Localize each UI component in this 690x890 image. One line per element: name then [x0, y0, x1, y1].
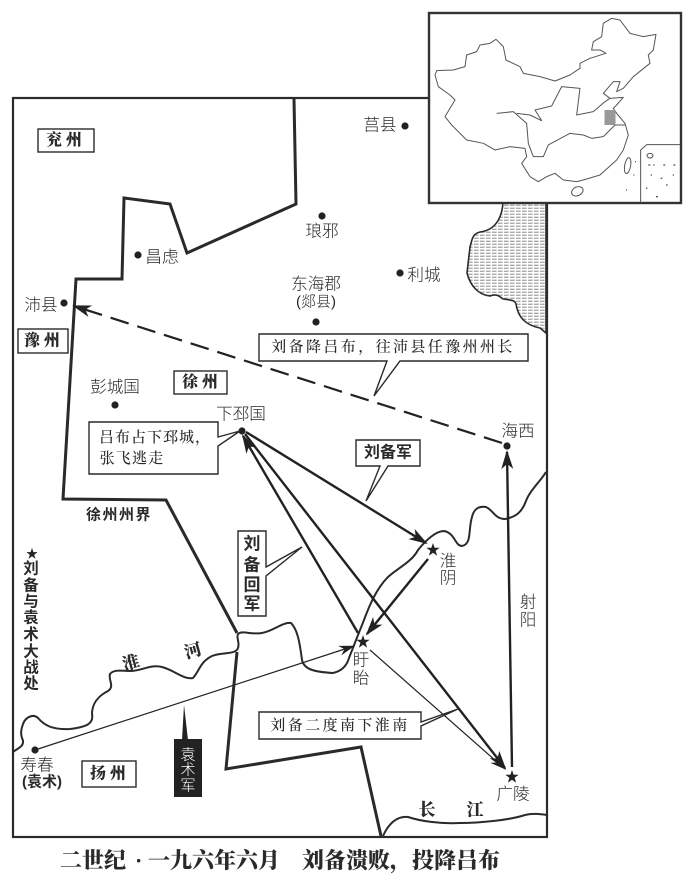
title: 刘备溃败，投降吕布: [302, 848, 500, 874]
Huai river: [13, 472, 546, 752]
arrow: Huaiyin to Xuyi: [367, 559, 428, 634]
callout: Liu Bei second march south: [259, 709, 458, 739]
title: 二世纪: [60, 848, 126, 872]
arrow: Xiapi to Guangling: [245, 434, 505, 768]
place names: 射: [520, 592, 536, 612]
Yan province boundary: [63, 99, 381, 836]
place names: (袁术): [22, 772, 62, 790]
thin arrow: Xuyi to Guangling: [370, 650, 505, 769]
side note: battle between Liu Bei and Yuan Shu: [23, 548, 39, 692]
label: Xu province: 徐州: [182, 372, 222, 391]
callout: Liu Bei returning army: 回: [244, 576, 260, 594]
place names: 盱: [353, 650, 369, 670]
label: Yu province: [18, 329, 68, 353]
label: Yang province: 扬州: [90, 764, 130, 782]
label: Yang province: [82, 761, 136, 787]
side note: battle between Liu Bei and Yuan Shu: 与: [23, 592, 39, 610]
side note: battle between Liu Bei and Yuan Shu: 术: [23, 626, 39, 644]
label: Yangtze river: [418, 800, 484, 820]
title: ·: [135, 848, 142, 872]
arrow: Guangling to Haixi: [507, 452, 512, 767]
label: Huai river: 淮: [120, 651, 142, 674]
label: Yuan Shu army: 袁: [180, 746, 196, 764]
callout: Lü Bu takes Xiapi: 吕布占下邳城，: [99, 428, 211, 446]
side note: battle between Liu Bei and Yuan Shu: 战: [23, 658, 39, 676]
China outline: [435, 18, 680, 202]
place names: 海西: [501, 422, 535, 440]
callout: Liu Bei returning army: 备: [244, 554, 260, 574]
label: Yangtze river: 长: [418, 800, 436, 820]
side note: battle between Liu Bei and Yuan Shu: 大: [23, 642, 39, 660]
label: Yangtze river: 江: [466, 800, 484, 820]
title: 一九六年六月: [148, 848, 280, 872]
place names: 寿春: [20, 756, 54, 774]
label: Yuan Shu army: [174, 705, 202, 797]
label: Yuan Shu army: 术: [180, 762, 196, 778]
arrow: Xuyi back to Xiapi: [243, 436, 358, 633]
callout: Liu Bei surrenders to Lü Bu: [259, 334, 528, 396]
label: Xuzhou boundary: 徐州州界: [86, 506, 152, 524]
place names: 阴: [440, 568, 456, 588]
place names: 下邳国: [216, 404, 266, 424]
label: Yu province: 豫州: [24, 330, 64, 350]
side note: battle between Liu Bei and Yuan Shu: 刘: [23, 558, 39, 578]
callout: Lü Bu takes Xiapi: 张飞逃走: [100, 449, 164, 467]
callout: Liu Bei army: [356, 440, 420, 501]
place names: 沛县: [24, 296, 58, 314]
map frame: [13, 98, 547, 837]
label: Huai river: [120, 640, 204, 674]
place names: 阳: [520, 610, 536, 630]
place names: 眙: [353, 668, 369, 688]
label: Yuan Shu army: 军: [180, 778, 196, 794]
place names: 昌虑: [145, 248, 179, 266]
place names: [20, 116, 536, 804]
dashed arrow to Peixian: [74, 306, 502, 443]
arrow: Xiapi to Huaiyin: [246, 432, 426, 543]
thin arrow: Shouchun to Xuyi: [38, 646, 354, 749]
highlighted region: [604, 110, 616, 125]
side note: battle between Liu Bei and Yuan Shu: 备: [23, 576, 39, 594]
callout: Liu Bei surrenders to Lü Bu: 刘备降吕布，往沛县任豫州州长: [271, 338, 515, 356]
place names: 广陵: [496, 784, 530, 804]
place names: 彭城国: [90, 378, 140, 396]
place names: 淮: [440, 552, 456, 570]
label: Xu province: [174, 371, 227, 394]
callout: Liu Bei second march south: 刘备二度南下淮南: [270, 716, 410, 734]
side note: battle between Liu Bei and Yuan Shu: 处: [23, 674, 39, 692]
label: Yan province: 兖州: [46, 130, 86, 149]
place names: 东海郡: [291, 274, 341, 294]
sea hatched area: [467, 200, 546, 333]
battle stars: [356, 543, 519, 783]
label: Yan province: [38, 129, 94, 152]
city dots: [31, 122, 511, 754]
callout: Lü Bu takes Xiapi: [89, 422, 240, 474]
Yangtze river: [383, 814, 547, 836]
side note: battle between Liu Bei and Yuan Shu: 袁: [23, 608, 39, 626]
callout: Liu Bei returning army: [238, 531, 302, 616]
place names: (郯县): [296, 294, 336, 310]
callout: Liu Bei army: 刘备军: [364, 442, 412, 462]
callout: Liu Bei returning army: 刘: [244, 534, 260, 554]
place names: 琅邪: [305, 222, 339, 240]
inset map of China: [429, 13, 681, 203]
place names: 莒县: [363, 116, 397, 134]
label: Huai river: 河: [182, 640, 204, 662]
place names: 利城: [407, 266, 441, 284]
callout: Liu Bei returning army: 军: [244, 594, 260, 614]
